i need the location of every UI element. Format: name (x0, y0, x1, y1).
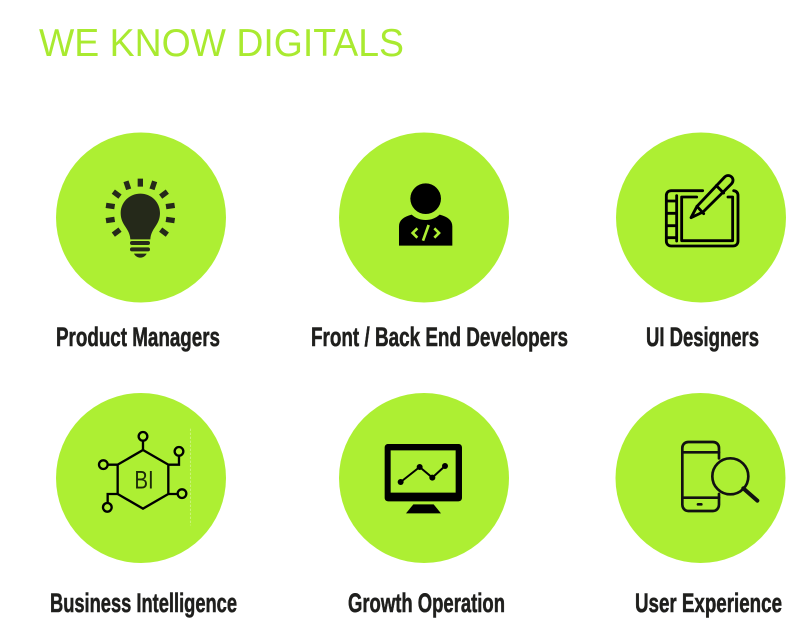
circle: growth operation (339, 393, 509, 563)
icon: phone and magnifier (682, 442, 757, 511)
circle: business intelligence (56, 393, 226, 563)
icon: BI hexagon network: BI (134, 467, 154, 494)
circle: ui designers (616, 132, 786, 302)
label: growth operation: Growth Operation (348, 588, 505, 618)
circle: user experience (616, 393, 786, 563)
icon: monitor with chart (385, 444, 462, 513)
panel: user experience (616, 393, 786, 563)
panel: ui designers (616, 132, 786, 302)
panel: product managers (56, 132, 226, 302)
label: developers: Front / Back End Developers (311, 322, 568, 352)
panel: developers (339, 132, 509, 302)
icon: BI hexagon network (99, 429, 190, 525)
label: product managers: Product Managers (56, 322, 220, 352)
icon: drawing tablet (666, 175, 738, 246)
label: business intelligence: Business Intelligence (50, 588, 237, 618)
circle: developers (339, 132, 509, 302)
panel: business intelligence (56, 393, 226, 563)
icon: developer (399, 183, 452, 246)
panel: growth operation (339, 393, 509, 563)
title: WE KNOW DIGITALS (39, 22, 404, 65)
circle: product managers (56, 132, 226, 302)
icon: light bulb (106, 179, 175, 258)
